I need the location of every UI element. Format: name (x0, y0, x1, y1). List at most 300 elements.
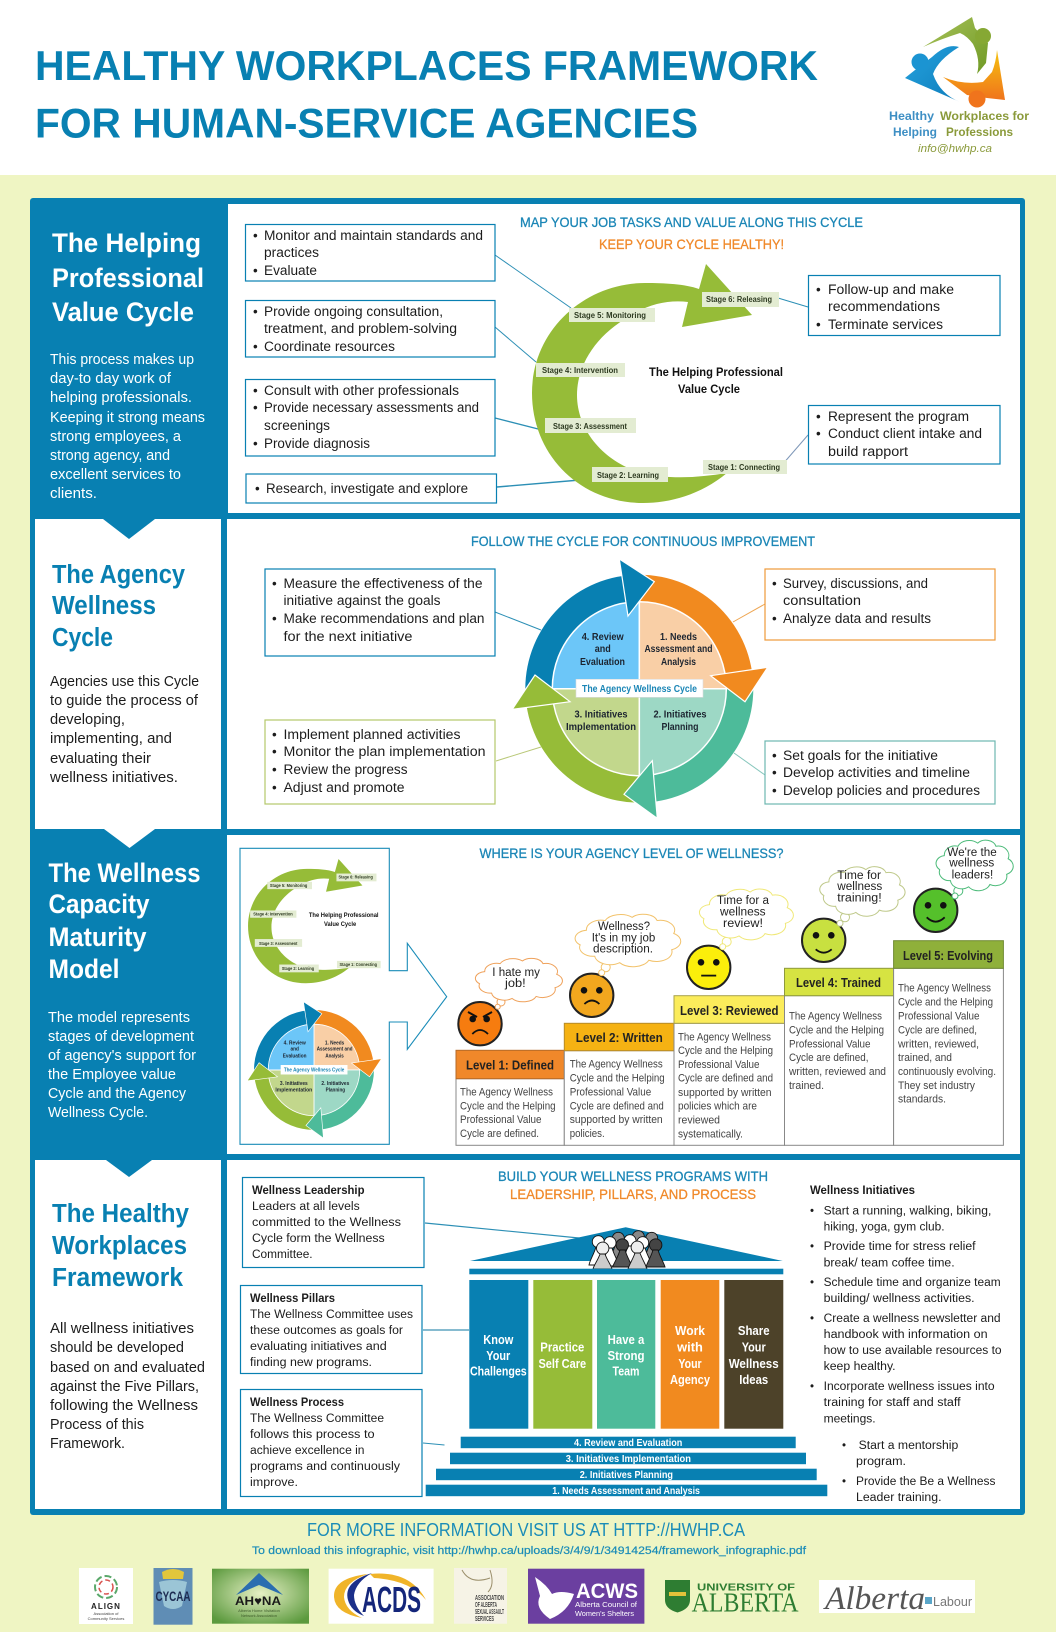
panel: wellness capacity maturity model sidebar: Capacity (48, 889, 150, 919)
cycle diagram: four-stage ring: The Agency Wellness Cycle (582, 684, 697, 695)
staircase: level 4 trained (784, 968, 894, 1145)
pillar: practice self care: Practice (540, 1340, 584, 1354)
logo: University of Alberta: ALBERTA (692, 1588, 799, 1618)
staircase: level 5 evolving: Cycle and the Helping (898, 996, 993, 1008)
callout: wellness process: improve. (250, 1477, 298, 1489)
panel: helping professional value cycle sidebar: This process makes up (50, 352, 194, 368)
icon: happy face with thought bubble: wellness (948, 858, 995, 870)
panel: helping professional value cycle sidebar: strong agency, and (50, 448, 170, 464)
staircase: level 1 defined: Professional Value (460, 1114, 542, 1126)
icon: happy face with thought bubble: leaders! (952, 870, 993, 882)
panel: healthy workplaces framework sidebar: Framework. (50, 1436, 125, 1452)
callout: releasing tasks: • (816, 317, 821, 332)
thumbnail: agency cycle: Planning (326, 1088, 345, 1094)
panel: wellness capacity maturity model sidebar: Maturity (48, 922, 146, 952)
pillar: work with your agency (661, 1280, 719, 1429)
pillar: share your wellness ideas (724, 1280, 783, 1429)
list: wellness initiatives: Start a mentorship (859, 1440, 958, 1452)
panel: helping professional value cycle sidebar: clients. (50, 486, 97, 502)
staircase: level 5 evolving (894, 941, 1003, 1145)
callout: implementation: • (272, 780, 277, 795)
logo: University of Alberta (665, 1580, 799, 1618)
callout: planning: • (772, 748, 777, 763)
callout: needs assessment (765, 569, 995, 640)
title: HEALTHY WORKPLACES FRAMEWORK (35, 42, 818, 89)
logo: Alberta Labour: Alberta (823, 1581, 925, 1617)
logo: association of alberta sexual assault services: ASSOCIATION (475, 1595, 504, 1602)
callout: planning: • (772, 765, 777, 780)
panel: healthy workplaces framework sidebar: All wellness initiatives (50, 1321, 194, 1337)
thumbnail: value cycle: Stage 3: Assessment (259, 941, 298, 946)
logo: ACWS (528, 1569, 644, 1624)
logo: Healthy Workplaces for Helping Professions: Workplaces for (940, 111, 1030, 123)
staircase: level 3 reviewed: reviewed (678, 1115, 720, 1127)
logo: ALIGN: Association of (94, 1611, 119, 1616)
list: wellness initiatives: • (842, 1440, 846, 1452)
icon: sad face with thought bubble: description. (593, 944, 653, 956)
heading: leadership pillars and process: LEADERSHIP, PILLARS, AND PROCESS (510, 1186, 756, 1202)
list: wellness initiatives: • (810, 1313, 814, 1325)
panel: agency wellness cycle sidebar: Wellness (52, 592, 156, 620)
panel: helping professional value cycle sidebar: Keeping it strong means (50, 410, 205, 426)
thumbnail: agency cycle: Implementation (275, 1088, 312, 1094)
callout: planning: Set goals for the initiative (783, 748, 938, 763)
callout: assessment tasks: Consult with other professionals (264, 383, 459, 398)
cycle diagram: four-stage ring: Planning (662, 722, 698, 733)
staircase: level 2 written: policies. (570, 1128, 605, 1140)
panel: healthy workplaces framework sidebar: following the Wellness (50, 1398, 198, 1414)
thumbnail: value cycle: Value Cycle (324, 921, 357, 928)
callout: wellness process: achieve excellence in (250, 1445, 364, 1457)
icon: neutral face with thought bubble: review! (723, 918, 763, 930)
pillar: work with your agency: with (676, 1340, 703, 1354)
list: wellness initiatives: Provide the Be a Wellness (856, 1476, 996, 1488)
cycle diagram: four-stage ring: and (595, 644, 611, 655)
pillar: practice self care: Self Care (538, 1356, 586, 1371)
callout: needs assessment: Survey, discussions, and (783, 576, 928, 591)
staircase: level 3 reviewed: Cycle and the Helping (678, 1045, 773, 1057)
list: wellness initiatives: • (810, 1206, 814, 1218)
cycle diagram: crescent arrow with stages: Stage 1: Connecting (708, 462, 780, 472)
icon: smiling face with thought bubble: wellness (836, 881, 883, 893)
callout: learning tasks: Research, investigate and explore (266, 481, 468, 496)
pillar: have a strong team: Strong (608, 1348, 645, 1363)
panel: agency wellness cycle sidebar: evaluating their (50, 751, 151, 767)
cycle diagram: crescent arrow with stages: Stage 2: Learning (597, 470, 659, 480)
pillar: share your wellness ideas: Wellness (729, 1356, 779, 1371)
thumbnail: agency cycle: Assessment and (317, 1047, 352, 1053)
callout: wellness process (240, 1390, 422, 1496)
callout: review and evaluation (265, 569, 495, 656)
pillar: know your challenges: Your (486, 1348, 510, 1363)
cycle diagram: four-stage ring: Analysis (661, 657, 696, 668)
pillar: practice self care (533, 1280, 592, 1429)
callout: needs assessment: consultation (783, 593, 861, 608)
staircase: level 2 written: Professional Value (570, 1086, 651, 1098)
staircase: level 2 written: Cycle are defined and (570, 1100, 664, 1112)
list: wellness initiatives: building/ wellness activities. (824, 1293, 975, 1305)
callout: learning tasks: • (255, 481, 260, 496)
panel: healthy workplaces framework sidebar: The Healthy (52, 1200, 190, 1228)
staircase: level 2 written: supported by written (570, 1114, 663, 1126)
thumbnail: value cycle: Stage 1: Connecting (340, 962, 377, 967)
callout: wellness leadership: Committee. (252, 1249, 313, 1261)
staircase: level 2 written: Level 2: Written (576, 1031, 663, 1045)
staircase: level 1 defined: Cycle are defined. (460, 1128, 539, 1140)
callout: connecting tasks (808, 406, 1000, 464)
panel: wellness capacity maturity model sidebar: Model (48, 954, 120, 984)
callout: assessment tasks: Provide necessary assessments and (264, 400, 479, 415)
cycle diagram: four-stage ring: 1. Needs (660, 632, 697, 643)
logo: association of alberta sexual assault services: OF ALBERTA (475, 1602, 497, 1609)
logo: ALIGN: Community Services (88, 1616, 124, 1621)
connector lines (495, 604, 765, 775)
callout: monitoring tasks (246, 224, 495, 281)
step: review and evaluation (461, 1437, 796, 1449)
callout: wellness leadership: committed to the Wellness (252, 1217, 401, 1229)
icon: happy face with thought bubble (914, 840, 1013, 932)
callout: planning: Develop policies and procedures (783, 783, 980, 798)
callout: needs assessment: Analyze data and results (783, 611, 931, 626)
title (35, 42, 818, 146)
panel: helping professional value cycle sidebar: excellent services to (50, 467, 181, 483)
main blue frame (30, 198, 1025, 1515)
callout: wellness leadership: Wellness Leadership (252, 1185, 364, 1197)
logo: association of alberta sexual assault services (454, 1568, 507, 1624)
callout: wellness leadership: Leaders at all levels (252, 1201, 360, 1213)
beam (469, 1269, 783, 1274)
callout: review and evaluation: Measure the effectiveness of the (284, 576, 482, 591)
logo: Healthy Workplaces for Helping Professions: Helping (893, 127, 937, 139)
callout: wellness pillars: Wellness Pillars (250, 1293, 335, 1305)
house diagram: roof, committee, pillars, steps (426, 1227, 827, 1497)
callout: implementation: Review the progress (284, 762, 408, 777)
icon: angry face with thought bubble (458, 958, 562, 1045)
callout: monitoring tasks: • (253, 263, 258, 278)
cycle diagram: crescent arrow with stages: Stage 3: Assessment (553, 421, 627, 431)
pillar: have a strong team: Have a (608, 1332, 645, 1347)
callout: releasing tasks: • (816, 282, 821, 297)
icon: angry face with thought bubble: job! (504, 978, 526, 990)
thumbnail: value cycle (248, 859, 381, 983)
list: wellness initiatives: Provide time for stress relief (824, 1241, 976, 1253)
logo: Alberta Labour (819, 1580, 975, 1617)
callout: assessment tasks: • (253, 436, 258, 451)
cycle diagram: crescent arrow with stages: Stage 4: Intervention (542, 365, 618, 375)
logo: ACDS: ACDS (362, 1579, 421, 1620)
icon: sad face with thought bubble: Wellness? (598, 921, 650, 933)
staircase: level 3 reviewed: supported by written (678, 1087, 772, 1099)
panel: wellness capacity maturity model sidebar: Wellness Cycle. (48, 1105, 148, 1121)
pillar: know your challenges (469, 1280, 528, 1429)
callout: review and evaluation: • (272, 611, 277, 626)
cycle diagram: four-stage ring: 4. Review (582, 632, 624, 643)
logo: ACWS: Alberta Council of (575, 1600, 638, 1609)
logo: ALIGN: ALIGN (91, 1602, 121, 1611)
thumbnail: agency cycle: 3. Initiatives (280, 1081, 308, 1087)
thumbnail: agency cycle: Evaluation (283, 1053, 306, 1059)
callout: assessment tasks: screenings (264, 418, 330, 433)
cycle diagram: crescent arrow with stages: Stage 6: Releasing (706, 294, 772, 304)
cycle diagram: crescent arrow with stages: Value Cycle (678, 382, 740, 396)
list: wellness initiatives: Wellness Initiatives (810, 1185, 915, 1197)
panel: healthy workplaces framework sidebar: Workplaces (52, 1232, 187, 1260)
icon: neutral face with thought bubble: Time for a (717, 895, 770, 907)
panel: healthy workplaces framework sidebar: Framework (52, 1264, 184, 1292)
callout: assessment tasks: • (253, 383, 258, 398)
panel: agency wellness cycle sidebar: Agencies use this Cycle (50, 674, 199, 690)
thumbnail: value cycle: Stage 5: Monitoring (270, 883, 308, 888)
pillar: know your challenges: Know (483, 1332, 514, 1347)
list: wellness initiatives: • (810, 1381, 814, 1393)
panel: agency wellness cycle (227, 519, 1020, 829)
logo: AHVNA: Alberta Home Visitation (238, 1608, 280, 1613)
icon: angry face with thought bubble: I hate my (492, 967, 540, 979)
callout: monitoring tasks: practices (264, 245, 319, 260)
step: initiatives planning (436, 1469, 817, 1481)
staircase: level 5 evolving: standards. (898, 1094, 946, 1106)
thumbnail: value cycle: The Helping Professional (309, 912, 379, 919)
callout: planning: • (772, 783, 777, 798)
cycle diagram: crescent arrow with stages (532, 264, 787, 503)
panel: wellness capacity maturity model sidebar: stages of development (48, 1029, 194, 1045)
pillar: work with your agency: Work (675, 1323, 706, 1338)
panel: agency wellness cycle sidebar (35, 519, 221, 829)
callout: wellness pillars: The Wellness Committee uses (250, 1309, 413, 1321)
icon: smiling face with thought bubble: training! (837, 893, 882, 905)
logo: CYCAA (154, 1568, 192, 1625)
connector lines (423, 1223, 579, 1445)
cycle diagram: four-stage ring: Implementation (566, 722, 636, 733)
panel: helping professional value cycle sidebar: day-to day work of (50, 371, 172, 387)
footer: more information link: FOR MORE INFORMATION VISIT US AT HTTP://HWHP.CA (307, 1520, 745, 1540)
list: wellness initiatives: training for staff and staff (824, 1397, 961, 1409)
callout: implementation: • (272, 727, 277, 742)
pillar: work with your agency: Your (678, 1356, 702, 1371)
thumbnail: agency cycle: The Agency Wellness Cycle (284, 1068, 344, 1074)
panel: helping professional value cycle sidebar (50, 228, 205, 502)
callout: monitoring tasks: • (253, 228, 258, 243)
callout: releasing tasks (808, 276, 1000, 336)
list: wellness initiatives (810, 1185, 1002, 1504)
staircase: level 3 reviewed (674, 996, 784, 1145)
step: initiatives implementation: 3. Initiatives Implementation (566, 1453, 691, 1465)
thumbnail: agency cycle: and (291, 1047, 299, 1053)
pillar: know your challenges: Challenges (470, 1364, 527, 1378)
logo: ACWS: ACWS (576, 1580, 638, 1603)
staircase: level 3 reviewed: Level 3: Reviewed (680, 1004, 778, 1018)
footer: download link: To download this infographic, visit http://hwhp.ca/uploads/3/4/9/1/34914254/framework_infographic.pdf (252, 1545, 807, 1557)
icon: neutral face with thought bubble: wellness (719, 906, 766, 918)
list: wellness initiatives: hiking, yoga, gym club. (824, 1222, 945, 1234)
callout: connecting tasks: • (816, 426, 821, 441)
callout: connecting tasks: • (816, 409, 821, 424)
icon: smiling face with thought bubble (802, 867, 905, 962)
staircase: level 4 trained: Level 4: Trained (796, 976, 881, 990)
list: wellness initiatives: program. (856, 1456, 906, 1468)
callout: review and evaluation: Make recommendations and plan (284, 611, 484, 626)
staircase: level 5 evolving: Cycle are defined, (898, 1024, 977, 1036)
panel: healthy workplaces framework sidebar (35, 1160, 221, 1509)
step: review and evaluation: 4. Review and Evaluation (574, 1437, 682, 1449)
thumbnail frame with arrow (240, 848, 447, 1144)
title: FOR HUMAN-SERVICE AGENCIES (35, 100, 698, 146)
panel: healthy workplaces framework sidebar: against the Five Pillars, (50, 1379, 199, 1395)
callout: wellness pillars (240, 1286, 422, 1374)
icon: happy face with thought bubble: We're the (947, 847, 997, 859)
panel: helping professional value cycle (228, 204, 1020, 513)
panel: wellness capacity maturity model sidebar: of agency's support for (48, 1048, 196, 1064)
callout: planning (765, 741, 995, 804)
staircase: level 2 written: The Agency Wellness (570, 1059, 663, 1071)
staircase: level 1 defined (456, 1050, 564, 1145)
cycle diagram: four-stage ring: 2. Initiatives (654, 709, 707, 720)
callout: wellness process: Wellness Process (250, 1397, 344, 1409)
staircase: level 1 defined: Cycle and the Helping (460, 1100, 556, 1112)
callout: assessment tasks (246, 380, 495, 456)
staircase: level 5 evolving: Level 5: Evolving (903, 949, 993, 963)
staircase: level 3 reviewed: systematically. (678, 1129, 743, 1141)
panel: wellness capacity maturity model sidebar (48, 858, 200, 1121)
callout: implementation: • (272, 744, 277, 759)
callout: wellness pillars: finding new programs. (250, 1357, 372, 1369)
thumbnail: value cycle: Stage 6: Releasing (339, 875, 373, 880)
callout: releasing tasks: recommendations (828, 299, 940, 314)
icon: committee figures (589, 1231, 665, 1269)
cycle diagram: four-stage ring: Assessment and (644, 644, 712, 655)
heading: keep your cycle healthy: KEEP YOUR CYCLE HEALTHY! (599, 236, 784, 252)
staircase: level 1 defined: The Agency Wellness (460, 1086, 553, 1098)
callout: wellness process: The Wellness Committee (250, 1413, 384, 1425)
callout: review and evaluation: • (272, 576, 277, 591)
panel: agency wellness cycle sidebar: to guide the process of (50, 693, 199, 709)
callout: wellness pillars: these outcomes as goals for (250, 1325, 403, 1337)
step: needs assessment and analysis (426, 1485, 827, 1497)
callout: connecting tasks: Represent the program (828, 409, 969, 424)
cycle diagram: four-stage ring: Evaluation (580, 657, 625, 668)
callout: intervention tasks: treatment, and problem-solving (264, 321, 457, 336)
panel: helping professional value cycle sidebar: Professional (52, 263, 204, 293)
staircase: level 5 evolving: written, reviewed, (897, 1038, 979, 1050)
staircase: level 5 evolving: Professional Value (898, 1010, 980, 1022)
logo: Healthy Workplaces for Helping Professions: info@hwhp.ca (918, 143, 992, 155)
heading: map your job tasks: MAP YOUR JOB TASKS AND VALUE ALONG THIS CYCLE (520, 214, 863, 230)
thumbnail: value cycle: Stage 2: Learning (282, 966, 314, 971)
thumbnail: agency cycle: 2. Initiatives (321, 1081, 349, 1087)
panel: agency wellness cycle sidebar: Cycle (52, 624, 113, 652)
logo: AHVNA: AH♥NA (235, 1594, 281, 1608)
logo: University of Alberta: UNIVERSITY OF (697, 1582, 796, 1594)
icon: neutral face with thought bubble (687, 889, 793, 989)
logo: association of alberta sexual assault services: SERVICES (475, 1616, 494, 1623)
callout: implementation: • (272, 762, 277, 777)
staircase: level 4 trained: Cycle are defined, (789, 1052, 868, 1064)
callout: monitoring tasks: Evaluate (264, 263, 317, 278)
callout: intervention tasks: • (253, 339, 258, 354)
list: wellness initiatives: how to use available resources to (824, 1345, 1002, 1357)
list: wellness initiatives: keep healthy. (824, 1361, 896, 1373)
callout: assessment tasks: • (253, 400, 258, 415)
step: needs assessment and analysis: 1. Needs Assessment and Analysis (552, 1485, 700, 1497)
pillar: share your wellness ideas: Your (742, 1340, 766, 1354)
logo: ACWS: Women's Shelters (575, 1609, 634, 1618)
panel: wellness capacity maturity model sidebar: The model represents (48, 1010, 190, 1026)
callout: wellness process: follows this process to (250, 1429, 375, 1441)
staircase: level 3 reviewed: Professional Value (678, 1059, 760, 1071)
thumbnail: agency cycle: 1. Needs (325, 1040, 344, 1046)
staircase: level 5 evolving: They set industry (898, 1080, 975, 1092)
list: wellness initiatives: • (810, 1241, 814, 1253)
callout: implementation: Monitor the plan implementation (284, 744, 486, 759)
list: wellness initiatives: break/ team coffee time. (824, 1258, 955, 1270)
callout: connecting tasks: Conduct client intake and (828, 426, 982, 441)
panel: wellness capacity maturity model sidebar: Cycle and the Agency (48, 1086, 187, 1102)
staircase: level 5 evolving: continuously evolving. (898, 1066, 996, 1078)
callout: assessment tasks: Provide diagnosis (264, 436, 370, 451)
heading: follow the cycle: FOLLOW THE CYCLE FOR CONTINUOUS IMPROVEMENT (471, 533, 815, 549)
list: wellness initiatives: meetings. (824, 1414, 876, 1426)
logo: ALIGN (79, 1568, 133, 1624)
logo: AHVNA (212, 1569, 309, 1624)
callout: planning: Develop activities and timeline (783, 765, 970, 780)
list: wellness initiatives: Schedule time and organize team (824, 1277, 1001, 1289)
thumbnail: value cycle: Stage 4: Intervention (253, 912, 293, 917)
logo: Healthy Workplaces for Helping Professions: Healthy (889, 111, 935, 123)
panel: helping professional value cycle sidebar: The Helping (52, 228, 201, 258)
thumbnail: agency cycle: Analysis (325, 1053, 344, 1059)
list: wellness initiatives: • (842, 1476, 846, 1488)
staircase: level 4 trained: written, reviewed and (788, 1066, 886, 1078)
callout: implementation (265, 720, 495, 804)
callout: releasing tasks: Terminate services (828, 317, 943, 332)
pointer: blue chevron between rows 3 and 4 (106, 1160, 152, 1177)
callout: connecting tasks: build rapport (828, 444, 908, 459)
pillar: have a strong team: Team (612, 1364, 640, 1378)
panel: healthy workplaces framework (227, 1160, 1020, 1509)
logo: association of alberta sexual assault services: SEXUAL ASSAULT (475, 1609, 504, 1616)
panel: wellness capacity maturity model (227, 835, 1020, 1154)
callout: review and evaluation: initiative against the goals (284, 593, 441, 608)
list: wellness initiatives: handbook with information on (824, 1329, 988, 1341)
staircase: level 4 trained: Professional Value (789, 1038, 870, 1050)
callout: intervention tasks: Provide ongoing consultation, (264, 304, 443, 319)
logo: Healthy Workplaces for Helping Professions: Professions (946, 127, 1013, 139)
logo: CYCAA: CYCAA (156, 1588, 190, 1604)
pointer: blue chevron between rows 1 and 2 (103, 519, 155, 539)
panel: healthy workplaces framework sidebar: Process of this (50, 1417, 144, 1433)
icon: sad face with thought bubble (570, 914, 681, 1017)
cycle diagram: four-stage ring: 3. Initiatives (574, 709, 628, 720)
callout: needs assessment: • (772, 576, 777, 591)
panel: agency wellness cycle sidebar: implementing, and (50, 731, 172, 747)
pillar: share your wellness ideas: Share (738, 1323, 770, 1338)
callout: needs assessment: • (772, 611, 777, 626)
cycle diagram: crescent arrow with stages: Stage 5: Monitoring (574, 310, 646, 320)
staircase: level 4 trained: Cycle and the Helping (789, 1024, 884, 1036)
icon: smiling face with thought bubble: Time for (837, 870, 881, 882)
pillar: share your wellness ideas: Ideas (739, 1372, 768, 1387)
callout: learning tasks (246, 474, 496, 503)
panel: wellness capacity maturity model sidebar: The Wellness (48, 858, 200, 888)
panel: helping professional value cycle sidebar: Value Cycle (52, 297, 194, 327)
thumbnail: agency cycle (247, 1002, 382, 1138)
panel: helping professional value cycle sidebar: strong employees, a (50, 429, 182, 445)
staircase: level 2 written (564, 1023, 674, 1145)
staircase: level 5 evolving: The Agency Wellness (898, 982, 991, 994)
list: wellness initiatives: Incorporate wellness issues into (824, 1381, 995, 1393)
callout: review and evaluation: for the next initiative (284, 629, 412, 644)
list: wellness initiatives: • (810, 1277, 814, 1289)
